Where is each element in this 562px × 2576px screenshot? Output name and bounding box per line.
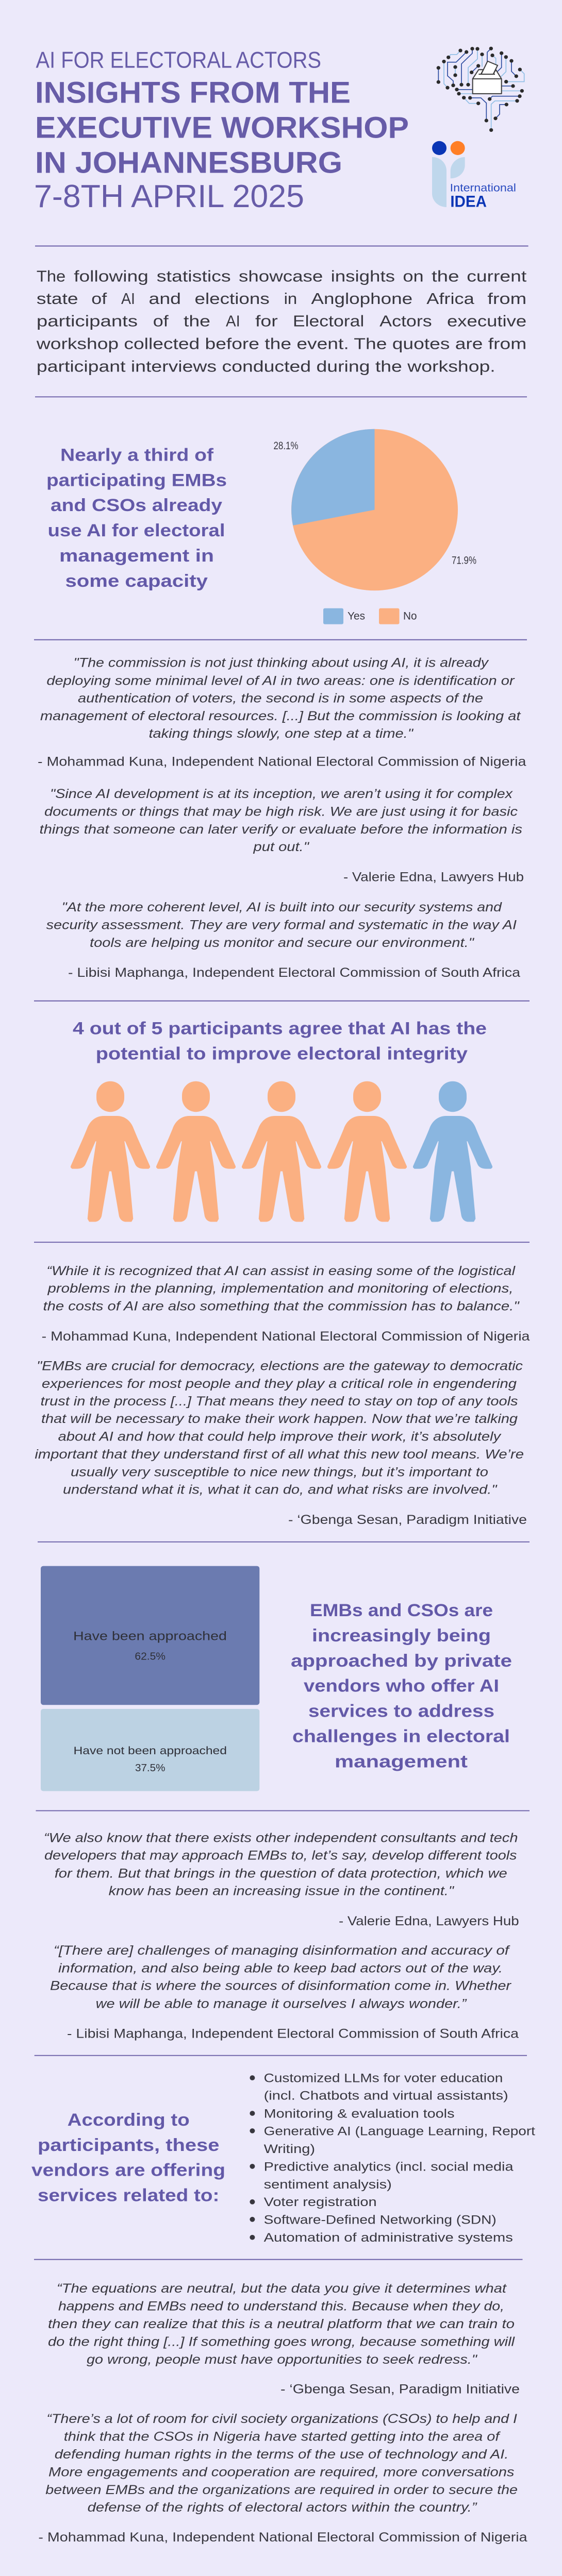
text block: introduction: participant interviews conducted during the workshop.: [37, 358, 495, 375]
treemap cell: have been approached: Have been approached: [73, 1630, 227, 1643]
heading: vendors approaching: approached by private: [291, 1651, 512, 1671]
quote: Libisi Maphanga on disinformation: [50, 1944, 519, 2041]
quote: Valerie Edna on data protection: [44, 1831, 519, 1928]
list: services: Monitoring & evaluation tools: [264, 2107, 454, 2121]
panel: private vendors: [41, 1566, 512, 1791]
heading: 4 out of 5: potential to improve electoral integrity: [96, 1044, 468, 1063]
quotes: vendors and disinformation: [44, 1831, 519, 2041]
legend: [323, 608, 417, 624]
text block: introduction: the: [432, 268, 459, 285]
quote: Mohammad Kuna on civil society: “There’s a lot of room for civil society organizations (CSOs) to help and I: [46, 2412, 517, 2426]
text block: introduction: participants: [37, 313, 138, 330]
quote: Valerie Edna: documents or things that may be high risk. We are just using it for basic: [44, 805, 518, 819]
heading: nearly a third: some capacity: [65, 571, 208, 591]
quotes: current AI use: [38, 656, 526, 980]
quotes: neutrality and civil society: [38, 2281, 527, 2545]
text block: introduction: on: [403, 268, 424, 285]
heading: vendors approaching: vendors who offer AI: [304, 1676, 499, 1696]
list: services: Generative AI (Language Learning, Report: [264, 2125, 535, 2138]
legend: No: [403, 609, 417, 622]
text block: introduction: state: [37, 290, 78, 308]
treemap chart: approached by vendors: [41, 1566, 259, 1791]
pictogram: five people: [71, 1081, 492, 1222]
text block: introduction: for: [255, 313, 278, 330]
quote: Mohammad Kuna: - Mohammad Kuna, Independent National Electoral Commission of Nigeria: [38, 755, 526, 769]
quote: Mohammad Kuna on civil society: More engagements and cooperation are required, more conversations: [48, 2465, 515, 2479]
quote: Mohammad Kuna: management of electoral resources. [...] But the commission is looking at: [40, 709, 521, 723]
icon: person 5: [413, 1081, 492, 1222]
quote: Libisi Maphanga on disinformation: Because that is where the sources of disinformation come in. Whether: [50, 1979, 512, 1993]
icon: person 2: [156, 1081, 236, 1222]
text block: introduction: Anglophone: [311, 290, 412, 308]
list: services: Customized LLMs for voter education: [264, 2072, 503, 2086]
treemap cell: have not been approached: [41, 1709, 259, 1791]
text block: introduction: following: [74, 268, 148, 285]
quote: Gbenga Sesan on neutrality: do the right thing [...] If something goes wrong, because something will: [48, 2335, 515, 2349]
quote: Valerie Edna on data protection: know has been an increasing issue in the continent.": [109, 1884, 455, 1898]
pie chart: AI use: 28.1%: [273, 439, 299, 452]
quote: Mohammad Kuna on costs: the costs of AI are also something that the commission has to balance.": [43, 1299, 520, 1313]
text block: introduction: of: [153, 313, 169, 330]
treemap cell: have been approached: [41, 1566, 259, 1705]
text block: introduction: current: [467, 268, 527, 285]
icon: International IDEA logo: IDEA: [450, 192, 487, 210]
list: services: sentiment analysis): [264, 2178, 392, 2192]
quote: Libisi Maphanga: - Libisi Maphanga, Independent Electoral Commission of South Africa: [68, 965, 521, 980]
treemap cell: have not been approached: Have not been approached: [73, 1744, 227, 1757]
title: workshop name: AI FOR ELECTORAL ACTORS: [36, 47, 321, 73]
quote: Gbenga Sesan on EMBs: usually very susceptible to nice new things, but it’s important to: [71, 1465, 488, 1479]
panel: AI usage: [46, 429, 476, 624]
text block: introduction: statistics: [157, 268, 231, 285]
icon: circuit brain with ballot box: [437, 47, 524, 132]
legend: Yes: [348, 609, 365, 622]
pie chart: AI use: 71.9%: [452, 554, 476, 566]
text block: introduction: in: [284, 290, 297, 308]
heading: nearly a third: participating EMBs: [46, 471, 227, 490]
heading: vendors approaching: challenges in electoral: [292, 1727, 510, 1746]
title: workshop name: IN JOHANNESBURG: [35, 145, 342, 179]
quote: Gbenga Sesan on neutrality: “The equations are neutral, but the data you give it determines what: [57, 2281, 507, 2296]
quote: Mohammad Kuna: "The commission is not just thinking about using AI, it is already: [73, 656, 489, 670]
title: workshop name: EXECUTIVE WORKSHOP: [35, 110, 409, 144]
heading: nearly a third: use AI for electoral: [47, 521, 225, 540]
text block: introduction: Africa: [426, 290, 474, 308]
pie chart: AI use: [273, 429, 476, 590]
quote: Gbenga Sesan on EMBs: experiences for most people and they play a critical role in engendering: [42, 1377, 517, 1391]
quotes: potential and costs: [35, 1264, 530, 1527]
list: services: Automation of administrative systems: [264, 2231, 513, 2245]
heading: according to participants: According to: [68, 2111, 190, 2130]
text block: introduction: Actors: [379, 313, 432, 330]
heading: according to participants: vendors are offering: [31, 2161, 225, 2180]
title: workshop name: [34, 47, 409, 214]
text block: introduction: AI: [226, 313, 240, 330]
quote: Gbenga Sesan on neutrality: - ‘Gbenga Sesan, Paradigm Initiative: [280, 2382, 520, 2397]
quote: Gbenga Sesan on neutrality: [48, 2281, 520, 2397]
text block: introduction: insights: [331, 268, 395, 285]
text block: introduction: the: [184, 313, 210, 330]
heading: vendors approaching: [291, 1601, 512, 1771]
quote: Mohammad Kuna on costs: problems in the planning, implementation and monitoring of elections,: [47, 1281, 513, 1296]
heading: nearly a third: Nearly a third of: [60, 446, 214, 465]
quote: Libisi Maphanga: tools are helping us monitor and secure our environment.": [90, 936, 475, 950]
heading: according to participants: [31, 2111, 225, 2205]
quote: Libisi Maphanga: "At the more coherent level, AI is built into our security systems and: [62, 901, 502, 914]
quote: Libisi Maphanga on disinformation: information, and also being able to keep bad actors out of the way.: [58, 1961, 503, 1975]
treemap cell: have been approached: 62.5%: [135, 1651, 166, 1663]
text block: introduction: Electoral: [293, 313, 364, 330]
quote: Mohammad Kuna on civil society: think that the CSOs in Nigeria have started getting into the area of: [64, 2430, 501, 2444]
quote: Gbenga Sesan on EMBs: about AI and how that could help improve their work, it’s absolutely: [58, 1430, 502, 1444]
quote: Gbenga Sesan on neutrality: happens and EMBs need to understand this. Because when they do,: [58, 2299, 504, 2313]
list: services: (incl. Chatbots and virtual assistants): [264, 2089, 508, 2103]
quote: Valerie Edna: [39, 787, 524, 885]
quote: Gbenga Sesan on EMBs: important that they understand first of all what this new tool means. We’re: [35, 1447, 524, 1462]
header: [34, 47, 524, 214]
heading: 4 out of 5: [73, 1019, 487, 1063]
quote: Gbenga Sesan on EMBs: [35, 1359, 527, 1527]
heading: vendors approaching: EMBs and CSOs are: [310, 1601, 493, 1620]
text block: introduction: elections: [195, 290, 270, 308]
panel: electoral integrity: [71, 1019, 492, 1222]
quote: Gbenga Sesan on EMBs: trust in the process [...] That means they need to stay on top of any tools: [40, 1394, 518, 1409]
text block: introduction: AI: [121, 290, 135, 308]
list: services: Writing): [264, 2142, 315, 2156]
quote: Mohammad Kuna on costs: “While it is recognized that AI can assist in easing some of the logistical: [46, 1264, 516, 1278]
text block: introduction: workshop collected before the event. The quotes are from: [36, 335, 526, 353]
quote: Mohammad Kuna on civil society: between EMBs and the organizations are required in order to secure the: [45, 2483, 518, 2497]
quote: Mohammad Kuna on civil society: [38, 2412, 527, 2545]
quote: Valerie Edna: - Valerie Edna, Lawyers Hub: [343, 870, 524, 885]
icon: person 1: [71, 1081, 150, 1222]
heading: vendors approaching: increasingly being: [312, 1626, 491, 1646]
treemap cell: have not been approached: 37.5%: [135, 1762, 165, 1774]
quote: Mohammad Kuna on civil society: defense of the rights of electoral actors within the country.”: [88, 2501, 477, 2515]
quote: Gbenga Sesan on EMBs: that will be necessary to make their work happen. Now that we’re talking: [41, 1412, 518, 1426]
quote: Gbenga Sesan on neutrality: then they can realize that this is a neutral platform that we can train to: [48, 2317, 515, 2331]
list: services: Voter registration: [264, 2196, 377, 2209]
quote: Valerie Edna on data protection: - Valerie Edna, Lawyers Hub: [339, 1914, 519, 1928]
quote: Mohammad Kuna on civil society: defending human rights in the terms of the use of technology and AI.: [55, 2447, 508, 2462]
text block: introduction: from: [487, 290, 526, 308]
quote: Gbenga Sesan on EMBs: - ‘Gbenga Sesan, Paradigm Initiative: [288, 1513, 527, 1527]
quote: Valerie Edna on data protection: “We also know that there exists other independent consultants and tech: [44, 1831, 518, 1845]
quote: Gbenga Sesan on EMBs: "EMBs are crucial for democracy, elections are the gateway to democratic: [37, 1359, 523, 1373]
icon: person 4: [327, 1081, 407, 1222]
text block: introduction: showcase: [239, 268, 323, 285]
quote: Mohammad Kuna: deploying some minimal level of AI in two areas: one is identification or: [46, 674, 515, 688]
heading: according to participants: participants, these: [38, 2136, 219, 2155]
quote: Mohammad Kuna on costs: [42, 1264, 530, 1344]
heading: vendors approaching: management: [335, 1752, 468, 1771]
icon: International IDEA logo: [432, 141, 516, 210]
list: services: Software-Defined Networking (SDN): [264, 2213, 497, 2227]
heading: nearly a third: [46, 446, 227, 591]
list: services: Predictive analytics (incl. social media: [264, 2160, 514, 2174]
panel: vendor services: [31, 2072, 535, 2245]
text block: introduction: and: [148, 290, 181, 308]
text block: introduction: The: [37, 268, 65, 285]
quote: Libisi Maphanga on disinformation: - Libisi Maphanga, Independent Electoral Commission of South Africa: [67, 2027, 519, 2041]
quote: Mohammad Kuna: taking things slowly, one step at a time.": [148, 726, 414, 741]
quote: Mohammad Kuna: [38, 656, 526, 769]
text block: introduction: [36, 268, 527, 375]
quote: Valerie Edna on data protection: developers that may approach EMBs to, let’s say, develop different tools: [44, 1849, 517, 1863]
heading: according to participants: services related to:: [38, 2186, 219, 2205]
quote: Mohammad Kuna: authentication of voters, the second is in some aspects of the: [78, 691, 483, 706]
quote: Valerie Edna on data protection: for them. But that brings in the question of data protection, which we: [55, 1867, 507, 1880]
quote: Libisi Maphanga: security assessment. They are very formal and systematic in the way AI: [46, 918, 517, 932]
heading: nearly a third: and CSOs already: [51, 496, 222, 515]
quote: Mohammad Kuna on civil society: - Mohammad Kuna, Independent National Electoral Commission of Nigeria: [38, 2530, 527, 2545]
quote: Gbenga Sesan on EMBs: understand what it is, what it can do, and what risks are involved.": [63, 1483, 498, 1497]
icon: International IDEA logo: International: [450, 181, 516, 194]
title: workshop name: INSIGHTS FROM THE: [35, 75, 351, 109]
quote: Valerie Edna: things that someone can later verify or evaluate before the information is: [39, 822, 522, 837]
quote: Libisi Maphanga on disinformation: “[There are] challenges of managing disinformation and accuracy of: [54, 1944, 510, 1958]
quote: Valerie Edna: put out.": [253, 840, 310, 854]
quote: Libisi Maphanga on disinformation: we will be able to manage it ourselves I always wonder.”: [96, 1997, 467, 2011]
text block: introduction: executive: [447, 313, 526, 330]
quote: Gbenga Sesan on neutrality: go wrong, people must have opportunities to seek redress.": [87, 2352, 478, 2367]
heading: vendors approaching: services to address: [308, 1702, 494, 1721]
quote: Libisi Maphanga: [46, 901, 521, 980]
icon: person 3: [242, 1081, 321, 1222]
list: services: [250, 2072, 535, 2245]
quote: Valerie Edna: "Since AI development is at its inception, we aren’t using it for complex: [50, 787, 513, 801]
heading: 4 out of 5: 4 out of 5 participants agree that AI has the: [73, 1019, 487, 1039]
quote: Mohammad Kuna on costs: - Mohammad Kuna, Independent National Electoral Commission of Nigeria: [42, 1329, 530, 1344]
title: workshop name: 7-8TH APRIL 2025: [34, 179, 304, 214]
text block: introduction: of: [91, 290, 107, 308]
heading: nearly a third: management in: [59, 547, 214, 566]
